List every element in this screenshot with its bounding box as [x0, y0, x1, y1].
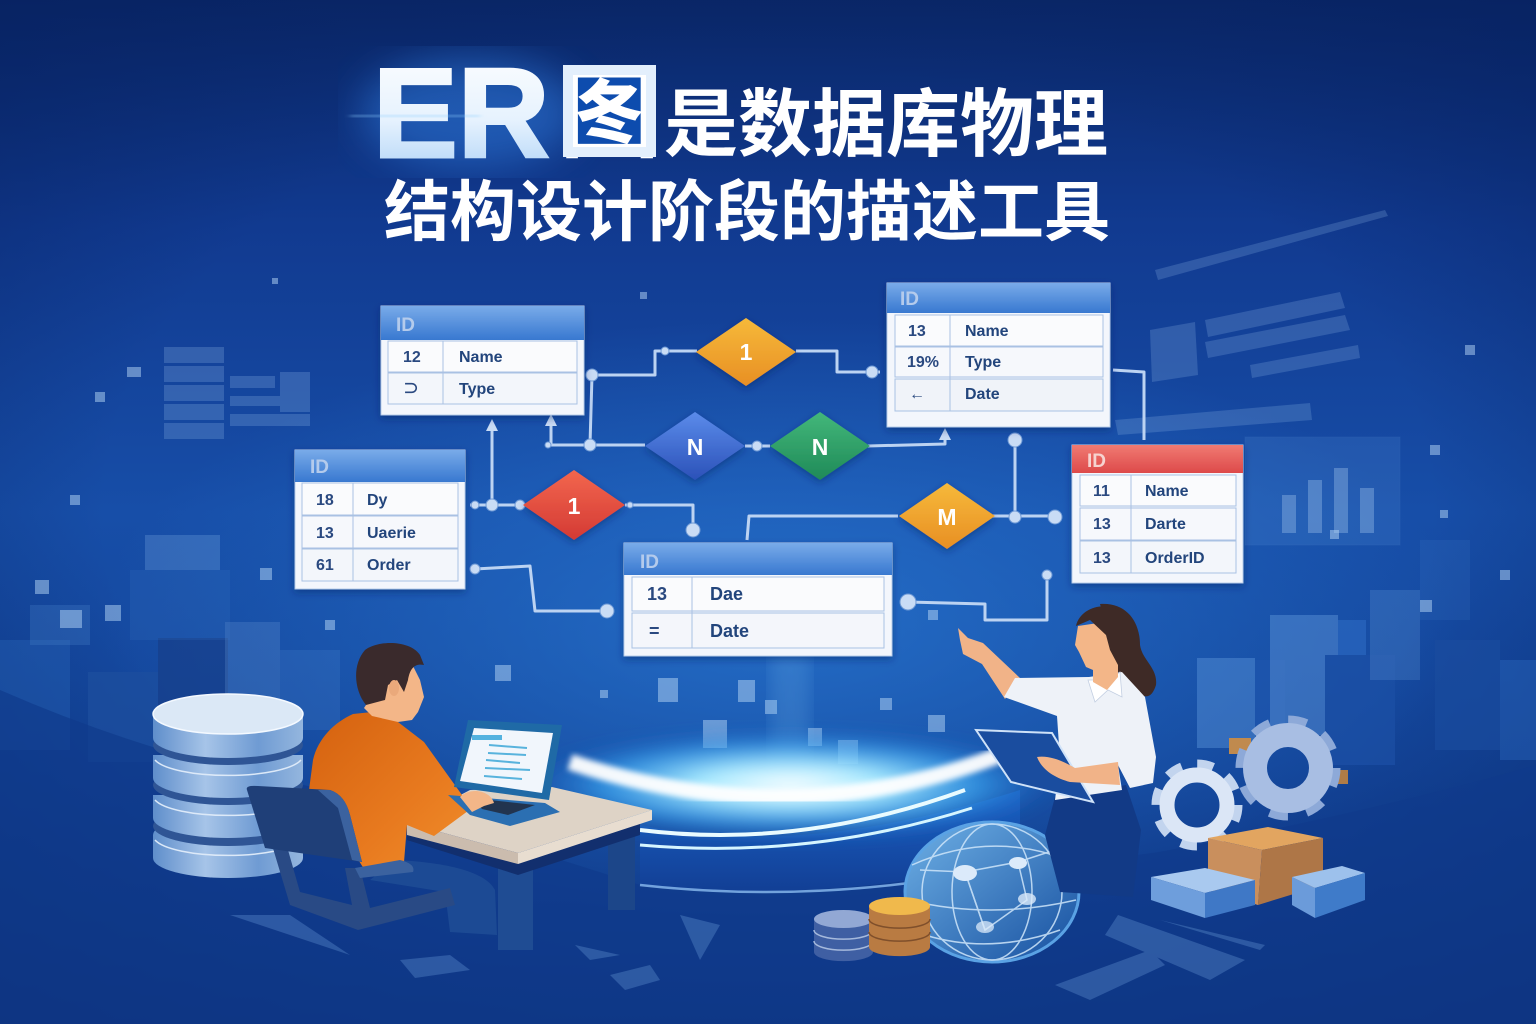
entity table centre: [624, 543, 892, 656]
glowing platform: [520, 650, 1060, 892]
jeans: [370, 860, 497, 935]
icon: database cylinder stack: [153, 694, 303, 878]
right data panels: [1115, 210, 1388, 435]
collar: [1088, 672, 1122, 702]
entity table top left: Name: [459, 349, 503, 366]
entity table top right: ID: [900, 289, 919, 310]
title lens flare: [350, 115, 480, 117]
entity table left: 18: [316, 492, 334, 509]
entity table top right: 19%: [907, 354, 939, 371]
skirt: [1045, 785, 1141, 897]
hair: [356, 643, 424, 705]
icon: gear large: [1229, 722, 1348, 814]
relationship diamond N blue: N: [687, 434, 703, 460]
vertical light beams: [770, 650, 810, 800]
relationship diamond N blue: [645, 412, 745, 480]
lower bright line one: [640, 790, 965, 835]
entity table top left: ⊃: [403, 381, 419, 398]
entity table left: ID: [310, 457, 329, 478]
entity table top left: [381, 306, 584, 415]
floating data squares: [35, 278, 1510, 764]
icon: blue coin stack: [814, 910, 873, 961]
man at desk: [247, 643, 652, 950]
entity table centre: Date: [710, 621, 749, 641]
ear: [389, 680, 399, 696]
entity table red right: OrderID: [1145, 550, 1205, 567]
left city skyline: [0, 535, 340, 762]
bright arc: [570, 755, 1000, 797]
holding arm: [1037, 757, 1120, 785]
relationship diamond 1 orange: 1: [740, 339, 753, 365]
entity table top left: Type: [459, 381, 495, 398]
entity table top right: [887, 283, 1110, 427]
icon: gold coin stack: [869, 897, 930, 956]
title glow: [360, 57, 580, 167]
title letters ER: ER: [373, 42, 549, 184]
hand: [460, 791, 494, 812]
chair: [247, 786, 455, 930]
entity table left: Uaerie: [367, 525, 416, 542]
connector arrowheads: [486, 414, 951, 440]
entity table top right: ←: [909, 386, 925, 403]
connector lines: [470, 347, 1144, 620]
back hair: [1100, 604, 1156, 696]
entity table centre: ID: [640, 552, 659, 573]
entity table left: [295, 450, 465, 589]
laptop: [448, 720, 562, 826]
entity table centre: Dae: [710, 584, 743, 604]
outer glow: [520, 730, 1060, 840]
entity table centre: =: [649, 621, 660, 641]
relationship diamond 1 red: 1: [568, 493, 581, 519]
lower floor band: [0, 690, 1536, 1024]
neck and face: [364, 660, 424, 722]
relationship diamond N green: [770, 412, 870, 480]
entity table left: Dy: [367, 492, 388, 509]
pointing forearm: [958, 628, 1020, 699]
orange shirt: [309, 712, 472, 872]
title rest of first line: 是数据库物理: [664, 83, 1108, 166]
entity table top right: 13: [908, 323, 926, 340]
left data panels: [164, 347, 310, 439]
title second line: 结构设计阶段的描述工具: [384, 175, 1110, 249]
relationship diamond 1 red: [523, 470, 625, 540]
blue block right: [1292, 866, 1365, 918]
entity table centre: 13: [647, 584, 667, 604]
white blouse with sleeve: [1004, 672, 1156, 800]
entity table top left: ID: [396, 315, 415, 336]
floor shards: [230, 915, 1265, 1000]
podium bottom rim: [640, 868, 1000, 892]
woman presenting: [958, 604, 1156, 897]
entity table left: Order: [367, 557, 411, 574]
relationship diamond M orange: M: [937, 504, 957, 530]
desk: [407, 787, 652, 950]
icon: gear small: [1157, 765, 1237, 845]
entity table top right: Date: [965, 386, 1000, 403]
brown cardboard box: [1208, 827, 1323, 905]
entity table left: 61: [316, 557, 334, 574]
relationship diamond 1 orange: [696, 318, 796, 386]
entity table top left: 12: [403, 349, 421, 366]
central background glow: [100, 320, 1460, 920]
entity table top right: Type: [965, 354, 1001, 371]
entity table red right: 13: [1093, 516, 1111, 533]
icon: globe: [905, 822, 1079, 962]
face: [1075, 622, 1118, 690]
podium base: [640, 790, 1020, 891]
relationship diamond M orange: [899, 483, 995, 549]
entity table red right: Name: [1145, 483, 1189, 500]
entity table red right: 11: [1093, 483, 1110, 500]
entity table red right: [1072, 445, 1243, 583]
tablet: [976, 730, 1093, 802]
right city skyline: [1197, 540, 1536, 765]
title character box: 图: [559, 59, 660, 171]
relationship diamond N green: N: [812, 434, 828, 460]
connector end dots: [470, 347, 1062, 618]
entity table red right: Darte: [1145, 516, 1186, 533]
entity table left: 13: [316, 525, 334, 542]
small brown blocks behind gear: [1229, 738, 1348, 784]
blue block left: [1151, 868, 1255, 918]
front hair: [1076, 606, 1127, 665]
title: [350, 42, 1110, 249]
entity table red right: ID: [1087, 451, 1106, 472]
entity table red right: 13: [1093, 550, 1111, 567]
entity table top right: Name: [965, 323, 1009, 340]
right bar chart panel: [1245, 437, 1400, 545]
lower bright line two: [640, 808, 972, 848]
